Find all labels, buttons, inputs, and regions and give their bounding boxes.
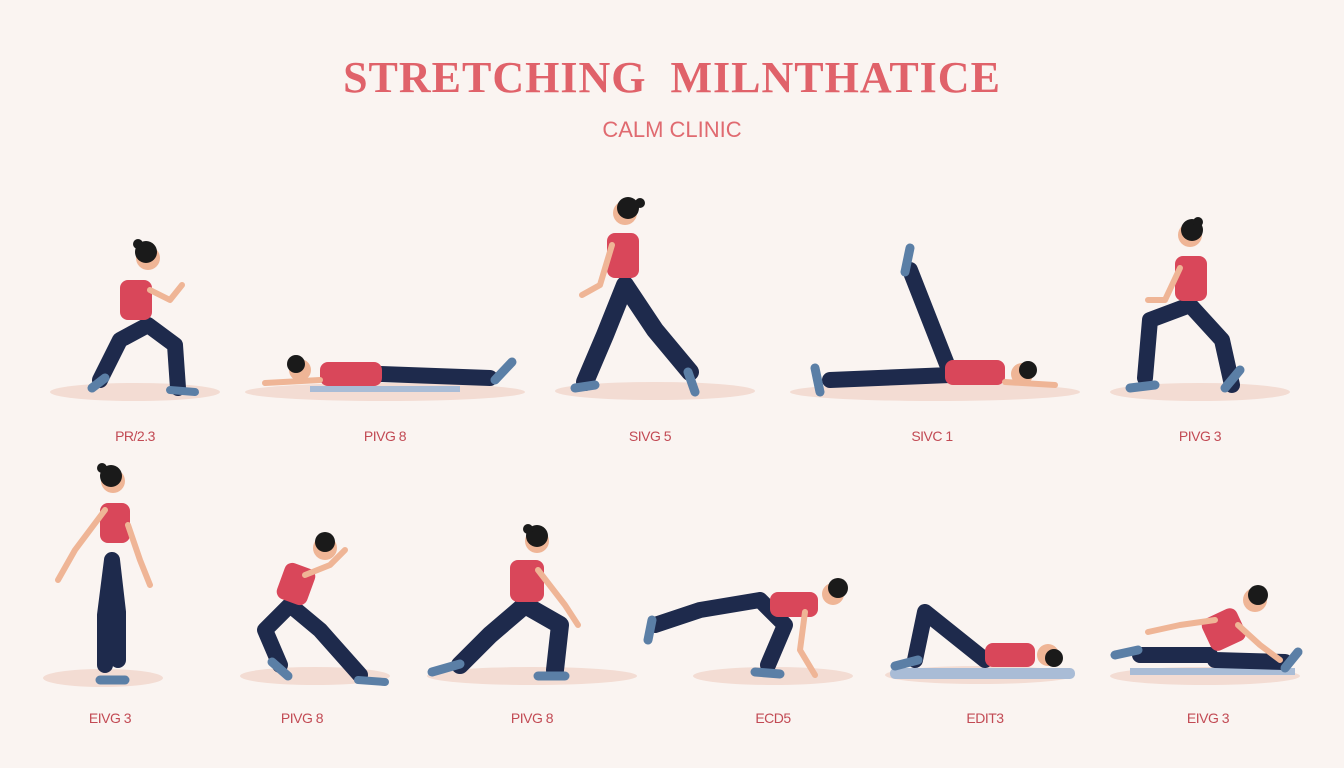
- title: STRETCHING MILNTHATICE: [343, 53, 1001, 102]
- text: EDIT3: [966, 710, 1004, 726]
- text: ECD5: [755, 710, 791, 726]
- figure: lunge standing: [555, 197, 755, 400]
- text: EIVG 3: [1187, 710, 1229, 726]
- text: PIVG 8: [511, 710, 553, 726]
- subtitle: CALM CLINIC: [602, 117, 742, 142]
- labels row 2: [89, 710, 1229, 726]
- figure: downward dog: [648, 578, 853, 685]
- figure: lying knees up: [885, 612, 1075, 684]
- text: SIVC 1: [911, 428, 953, 444]
- figure: lying: [245, 355, 525, 401]
- text: PR/2.3: [115, 428, 155, 444]
- figure: kneeling lunge: [1110, 217, 1290, 401]
- figure: kneeling: [50, 239, 220, 401]
- text: PIVG 3: [1179, 428, 1221, 444]
- labels row 1: [115, 428, 1221, 444]
- figure: side lunge: [240, 532, 390, 685]
- figure: leg raise: [790, 248, 1080, 401]
- text: PIVG 8: [281, 710, 323, 726]
- figure: seated stretch: [1110, 585, 1300, 685]
- figure: standing: [43, 463, 163, 687]
- figure: lunge: [427, 524, 637, 685]
- text: SIVG 5: [629, 428, 671, 444]
- text: EIVG 3: [89, 710, 131, 726]
- text: PIVG 8: [364, 428, 406, 444]
